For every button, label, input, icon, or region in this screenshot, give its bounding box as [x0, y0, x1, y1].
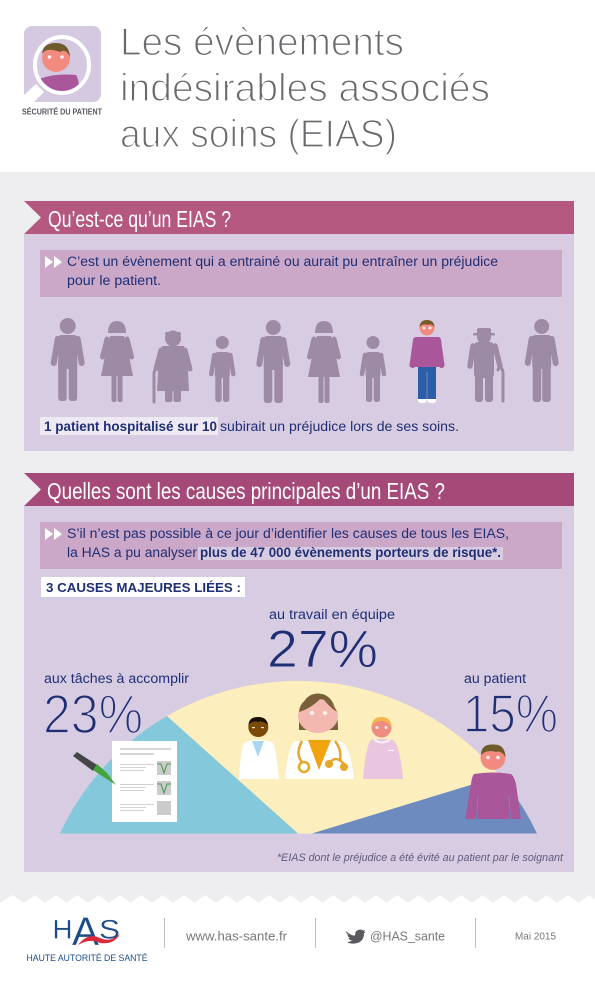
- title: [120, 21, 490, 156]
- icon: old woman with cane: [154, 330, 190, 402]
- website: www.has-sante.fr: [185, 928, 288, 944]
- heading: qu'est-ce qu'un EIAS: Qu’est-ce qu’un EIAS ?: [48, 206, 231, 232]
- panel: qu'est-ce qu'un EIAS: [24, 201, 574, 451]
- icon: twitter bird: [346, 930, 366, 944]
- callout: definition: pour le patient.: [67, 273, 161, 288]
- logo: HAS: S: [99, 914, 120, 944]
- heading: causes principales: Quelles sont les causes principales d’un EIAS ?: [47, 478, 445, 504]
- sector: travail en équipe 27%: [167, 681, 500, 834]
- callout: definition: C’est un évènement qui a entrainé ou aurait pu entraîner un préjudice: [67, 254, 498, 269]
- logo: HAS: H: [52, 914, 72, 944]
- title: aux soins (EIAS): [120, 113, 397, 156]
- stat: 15% patient: au patient: [464, 671, 526, 686]
- icon: child 2: [362, 336, 384, 402]
- logo: HAS: A: [72, 910, 99, 954]
- statistic: 1 patient sur 10: [40, 417, 459, 435]
- footnote: *EIAS dont le préjudice a été évité au patient par le soignant: [277, 852, 564, 864]
- header icon: sécurité du patient: [22, 26, 102, 116]
- stat: 23% tâches: [43, 671, 190, 745]
- pictogram row: 10 patients: [54, 318, 556, 403]
- heading: causes principales: [24, 473, 574, 506]
- icon: man 3: [528, 319, 556, 402]
- footer: [26, 910, 556, 964]
- icon: woman 1: [101, 321, 133, 402]
- title: Les évènements: [120, 21, 404, 64]
- chart: arc sectors: [60, 681, 537, 834]
- sector: tâches 23%: [60, 716, 299, 834]
- icon: patient in chart: [465, 744, 521, 819]
- logo: HAS: HAUTE AUTORITÉ DE SANTÉ: [26, 953, 148, 964]
- icon: pen: [73, 752, 116, 785]
- callout: intro: plus de 47 000 évènements porteurs de risque*.: [200, 545, 501, 560]
- panel: causes principales: [24, 473, 574, 872]
- icon: woman 2: [308, 321, 340, 403]
- label: 3 causes majeures: [41, 577, 245, 597]
- statistic: 1 patient sur 10: subirait un préjudice lors de ses soins.: [220, 419, 459, 434]
- callout: intro: la HAS a pu analyser: [67, 545, 198, 560]
- logo: HAS: [26, 910, 148, 964]
- twitter handle: @HAS_sante: [370, 928, 445, 944]
- title: indésirables associés: [120, 67, 490, 110]
- stat: 23% tâches: aux tâches à accomplir: [44, 671, 190, 686]
- statistic: 1 patient sur 10: 1 patient hospitalisé sur 10: [44, 419, 217, 434]
- icon: woman doctor with stethoscope: [285, 694, 354, 779]
- stat: 27% travail en équipe: [267, 607, 395, 679]
- label: 3 causes majeures: 3 CAUSES MAJEURES LIÉES :: [46, 580, 241, 595]
- callout: intro: [40, 522, 562, 569]
- icon: highlighted patient: [412, 320, 442, 403]
- stat: 27% travail en équipe: au travail en équipe: [269, 607, 395, 622]
- icon: man 2: [259, 320, 287, 403]
- header icon: sécurité du patient: SÉCURITÉ DU PATIENT: [22, 108, 102, 116]
- stat: 27% travail en équipe: 27%: [267, 620, 378, 679]
- icon: nurse: [363, 717, 403, 779]
- callout: intro: S’il n’est pas possible à ce jour d’identifier les causes de tous les EIAS,: [67, 526, 509, 541]
- stat: 15% patient: 15%: [463, 684, 558, 744]
- icon: checklist document: [112, 741, 177, 822]
- icon: doctor: [239, 717, 279, 779]
- date: Mai 2015: [515, 932, 556, 942]
- callout: definition: [40, 250, 562, 297]
- icon: man 1: [54, 318, 82, 401]
- sector: patient 15%: [312, 776, 537, 834]
- heading: qu'est-ce qu'un EIAS: [24, 201, 574, 234]
- stat: 23% tâches: 23%: [43, 683, 143, 745]
- icon: old man with cane: [470, 328, 503, 402]
- icon: child 1: [211, 336, 233, 402]
